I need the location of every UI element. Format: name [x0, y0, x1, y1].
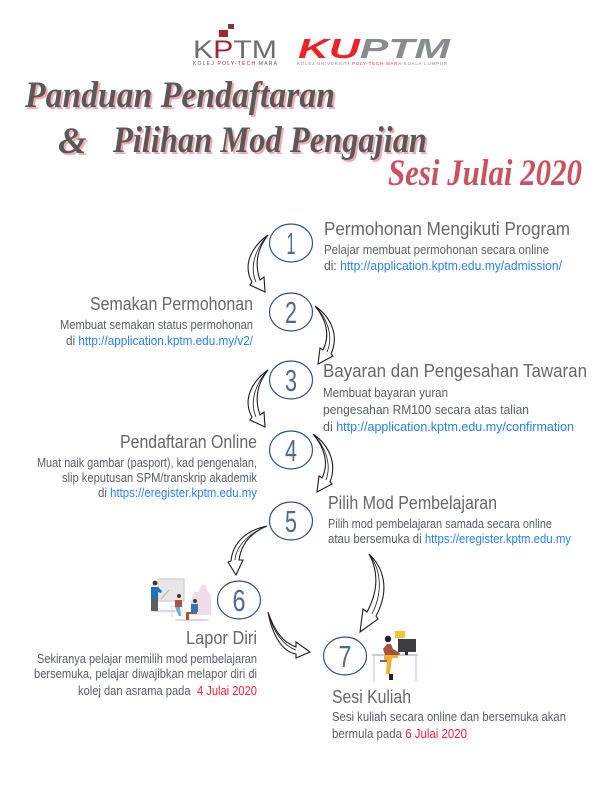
step 6 text: bersemuka, pelajar diwajibkan melapor diri di: [34, 666, 257, 681]
step 2 text: Membuat semakan status permohonan: [60, 317, 253, 332]
logo: KPTM: [193, 24, 278, 67]
title: Panduan Pendaftaran: [26, 77, 337, 118]
step 1 text: Permohonan Mengikuti Program: [324, 219, 570, 239]
logo: KPTM: KPTM: [193, 36, 277, 64]
step 1 text: [324, 219, 570, 273]
step 3 text: Membuat bayaran yuran: [323, 385, 448, 400]
step 2 text: di http://application.kptm.edu.my/v2/: [66, 333, 253, 348]
step 2 badge: 2: [285, 295, 297, 330]
title: Pilihan Mod Pengajian: [112, 120, 427, 161]
step 4 text: Pendaftaran Online: [120, 432, 257, 452]
step 3 text: di http://application.kptm.edu.my/confirmation: [323, 419, 574, 434]
step 6 text: Sekiranya pelajar memilih mod pembelajaran: [37, 651, 257, 666]
icon: student at computer: [372, 631, 418, 682]
step 5 text: Pilih Mod Pembelajaran: [328, 493, 497, 513]
step 5 text: [328, 493, 571, 546]
arrow: 2 to 3: [315, 306, 334, 364]
step 7 text: Sesi kuliah secara online dan bersemuka akan: [332, 709, 566, 724]
step 1 badge: 1: [286, 226, 296, 261]
step 7 text: bermula pada 6 Julai 2020: [332, 726, 467, 741]
step 6 text: kolej dan asrama pada 4 Julai 2020: [78, 683, 257, 698]
step 4 badge: 4: [285, 433, 297, 468]
step 3 text: [323, 361, 587, 434]
step 3 badge: [270, 361, 312, 399]
logo: KUPTM: KOLEJ UNIVERSITI POLY-TECH MARA KUALA LUMPUR: [297, 61, 448, 66]
step 4 badge: [270, 431, 312, 469]
arrow: 4 to 5: [313, 434, 333, 492]
step 3 text: Bayaran dan Pengesahan Tawaran: [323, 361, 587, 381]
step 7 text: [332, 687, 566, 741]
icon: classroom teacher and students: [151, 579, 211, 621]
step 7 badge: [324, 637, 366, 675]
step 2 text: [60, 294, 253, 348]
step 2 badge: [270, 293, 312, 331]
title: Panduan Pendaftaran: [24, 75, 335, 116]
arrow: 1 to 2: [248, 235, 268, 292]
title: [24, 75, 429, 164]
step 6 badge: 6: [232, 583, 246, 618]
step 4 text: [37, 432, 257, 500]
step 3 badge: 3: [285, 363, 297, 398]
step 1 text: di: http://application.kptm.edu.my/admission/: [324, 258, 562, 273]
step 1 badge: [270, 224, 312, 262]
step 5 text: Pilih mod pembelajaran samada secara online: [328, 516, 552, 531]
step 7 badge: 7: [338, 639, 352, 674]
title: Pilihan Mod Pengajian: [114, 122, 429, 163]
step 1 text: Pelajar membuat permohonan secara online: [324, 242, 549, 257]
step 6 text: [34, 628, 257, 698]
step 5 badge: 5: [285, 504, 297, 539]
logo: KPTM: KOLEJ POLY-TECH MARA: [193, 61, 278, 67]
step 7 text: Sesi Kuliah: [332, 687, 411, 707]
arrow: 5 to 6: [228, 526, 267, 575]
step 4 text: Muat naik gambar (pasport), kad pengenalan,: [37, 455, 257, 470]
step 5 text: atau bersemuka di https://eregister.kptm.edu.my: [328, 531, 571, 546]
step 6 text: Lapor Diri: [186, 628, 257, 648]
title: &: [58, 121, 87, 162]
arrow: 3 to 4: [248, 370, 268, 427]
arrow: 6 to 7: [268, 612, 310, 658]
title: &: [60, 123, 89, 164]
step 4 text: di https://eregister.kptm.edu.my: [98, 485, 257, 500]
logo: KUPTM: KU PTM: [298, 33, 451, 64]
arrow: 5 to 7: [360, 554, 384, 632]
step 4 text: slip keputusan SPM/transkrip akademik: [62, 470, 257, 485]
step 2 text: Semakan Permohonan: [90, 294, 253, 314]
step 5 badge: [270, 502, 312, 540]
step 3 text: pengesahan RM100 secara atas talian: [323, 402, 529, 417]
step 6 badge: [218, 581, 260, 619]
